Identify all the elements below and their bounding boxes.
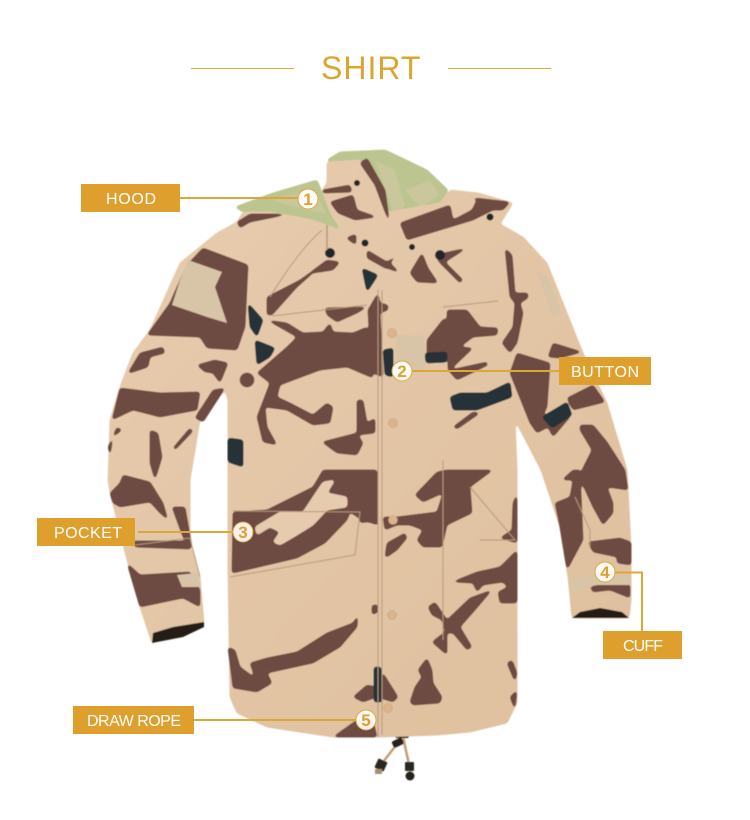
callout: draw rope: DRAW ROPE bbox=[87, 713, 181, 730]
seams and flaps bbox=[135, 230, 590, 737]
callout: button: BUTTON bbox=[571, 364, 639, 381]
hood lining bbox=[235, 150, 448, 231]
pocket highlight streak bbox=[255, 480, 347, 545]
callout: cuff: 4 bbox=[600, 563, 610, 582]
snaps and buttons bbox=[325, 180, 494, 712]
callout: cuff: CUFF bbox=[623, 638, 663, 655]
jacket body bbox=[108, 160, 631, 737]
callout: pocket: POCKET bbox=[54, 525, 122, 542]
callout: draw rope bbox=[73, 706, 376, 734]
callout: hood: 1 bbox=[303, 190, 313, 209]
callout: draw rope: 5 bbox=[361, 711, 371, 730]
callout: pocket bbox=[37, 518, 253, 546]
camouflage: navy patches bbox=[228, 268, 572, 702]
cuff openings bbox=[152, 608, 629, 643]
camouflage: brown patches bbox=[108, 158, 631, 737]
callout: pocket: 3 bbox=[238, 523, 248, 542]
callout: cuff bbox=[595, 562, 682, 659]
title: SHIRT bbox=[321, 50, 421, 86]
callout: button bbox=[392, 357, 651, 385]
callout: button: 2 bbox=[397, 362, 407, 381]
jacket illustration bbox=[108, 150, 631, 780]
callout: hood bbox=[81, 184, 318, 212]
callout: hood: HOOD bbox=[106, 191, 156, 208]
velcro patches bbox=[172, 260, 630, 593]
drawstring bbox=[374, 731, 414, 780]
